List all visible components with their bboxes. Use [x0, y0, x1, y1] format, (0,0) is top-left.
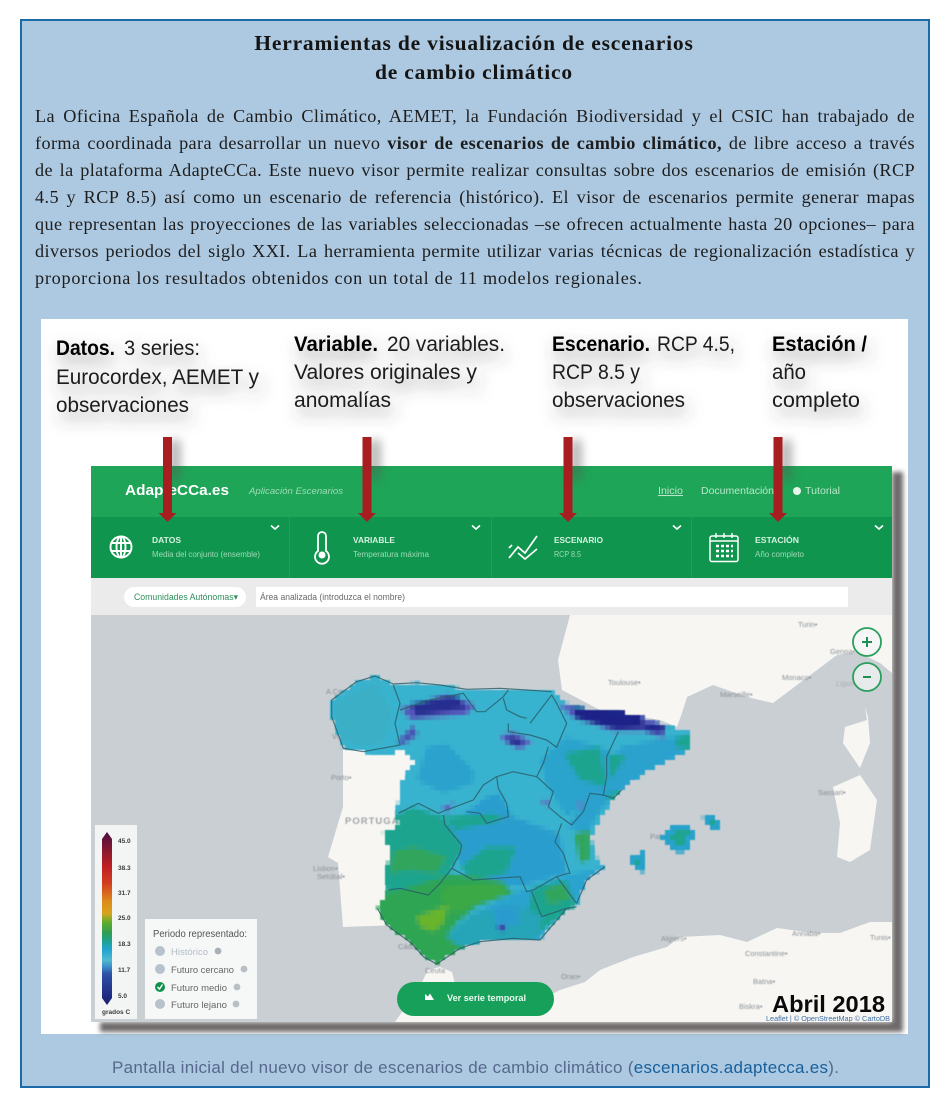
tab bar [91, 517, 892, 578]
map place labels: Ceuta [425, 966, 446, 975]
green app header [91, 466, 892, 517]
map place labels: Algiers• [661, 934, 687, 943]
map place labels: Setúbal• [317, 872, 345, 881]
intro text block: 4.5 y RCP 8.5) así como un escenario de referencia (histórico). El visor de escenarios permite generar mapas [35, 187, 915, 207]
callout: Datos: 3 series: [124, 337, 200, 360]
tab: escenario: ESCENARIO [554, 535, 603, 545]
callout: Escenario: RCP 4.5, [657, 333, 735, 356]
nav links [658, 485, 840, 497]
nav links: Documentación [701, 485, 774, 497]
callout: Estación [772, 333, 867, 412]
period legend: Periodo representado: [153, 929, 247, 940]
map attribution: Leaflet | © OpenStreetMap © CartoDB [766, 1015, 890, 1023]
tab: estación [710, 526, 883, 562]
arrow: Variable [358, 437, 376, 522]
callout: Datos: Datos. [56, 337, 115, 360]
map place labels: Marseille• [720, 690, 753, 699]
map place labels: Cádiz [398, 942, 417, 951]
land: France and Italy [558, 615, 892, 727]
color scale legend: 38.3 [118, 865, 131, 872]
intro text block: La Oficina Española de Cambio Climático, AEMET, la Fundación Biodiversidad y el CSIC han trabajado de [35, 106, 915, 126]
map place labels: Porto• [331, 773, 352, 782]
period legend: Futuro lejano [171, 1000, 227, 1011]
map place labels: Palma [650, 832, 672, 841]
white screenshot card [41, 319, 908, 1034]
map place labels: Turin• [798, 620, 818, 629]
choropleth: Spain temperature [320, 670, 721, 970]
search bar [91, 578, 892, 615]
tab: estación: ESTACIÓN [755, 534, 799, 545]
color scale legend: 31.7 [118, 890, 131, 897]
map place labels: Genoa• [830, 647, 856, 656]
map place labels: Oran• [561, 972, 581, 981]
callout: Estación: completo [772, 389, 860, 412]
arrow: Datos [158, 437, 176, 522]
tab: variable: VARIABLE [353, 535, 395, 545]
map place labels: Monaco• [782, 673, 812, 682]
button: ver serie temporal [397, 982, 554, 1016]
callout: Variable: Valores originales y [294, 361, 477, 384]
app subtitle: Aplicación Escenarios [248, 486, 343, 497]
callout: Variable: 20 variables. [387, 333, 505, 356]
callout: Variable: Variable. [294, 333, 378, 356]
map place labels: Annaba• [792, 929, 821, 938]
callout: Estación: año [772, 361, 806, 384]
tab: estación: Año completo [755, 550, 805, 559]
callout: Datos: Eurocordex, AEMET y [56, 366, 259, 389]
land: Corsica [843, 707, 870, 768]
period legend [145, 919, 257, 1019]
callout: Estación: Estación / [772, 333, 867, 356]
color scale legend: grados C [102, 1009, 130, 1016]
tab: escenario: RCP 8.5 [554, 550, 581, 559]
land: Portugal [328, 740, 420, 927]
color scale legend: 5.0 [118, 993, 127, 1000]
callout: Variable [294, 333, 505, 412]
title line 2: de cambio climático [375, 60, 573, 84]
intro text block: forma coordinada para desarrollar un nuevo visor de escenarios de cambio climático, de libre acceso a través [35, 133, 915, 153]
zoom in button [853, 628, 881, 656]
tab: datos: DATOS [152, 535, 181, 545]
Balearic Islands [630, 816, 721, 872]
map [91, 615, 892, 1023]
map place labels: Ligurian [836, 679, 863, 688]
callout: Escenario: RCP 8.5 y [552, 361, 640, 384]
map place labels [313, 620, 891, 1011]
color scale legend: 18.3 [118, 941, 131, 948]
nav links: Tutorial [805, 485, 840, 497]
map place labels: Vigo [332, 732, 347, 741]
callout: Variable: anomalías [294, 389, 391, 412]
color scale legend: 45.0 [118, 838, 131, 845]
screenshot figure [41, 319, 908, 1036]
map place labels: Batna• [753, 977, 776, 986]
callout: Escenario [552, 333, 735, 412]
color scale legend: 25.0 [118, 915, 131, 922]
map place labels: Lisbon• [313, 864, 338, 873]
callout: Datos: observaciones [56, 394, 189, 417]
callout: Datos [56, 337, 259, 417]
arrows soft shadow [170, 440, 791, 480]
intro text block: diversos periodos del siglo XXI. La herramienta permite utilizar varias técnicas de regionalización estadística y [35, 241, 915, 261]
app window shadow [100, 472, 903, 1032]
title line 1: Herramientas de visualización de escenarios [254, 31, 694, 55]
regional boundaries [332, 676, 622, 964]
caption: Pantalla inicial del nuevo visor de escenarios de cambio climático (escenarios.adaptecca.es). [112, 1058, 839, 1077]
label: Abril 2018: Abril 2018 [772, 991, 885, 1017]
map place labels: A Coruña [326, 687, 358, 696]
intro text block: que representan las proyecciones de las variables seleccionadas –se ofrecen actualmente hasta 20 opciones– para [35, 214, 915, 234]
tab: escenario [509, 526, 681, 559]
search bar: Área analizada (introduzca el nombre) [260, 592, 405, 602]
color scale legend [95, 825, 137, 1019]
map place labels: Sassari• [818, 788, 846, 797]
map place labels: Tunis• [870, 933, 891, 942]
map place labels: Toulouse• [608, 678, 641, 687]
tab: variable [315, 526, 480, 564]
zoom out button [853, 663, 881, 691]
app name: AdapteCCa.es [125, 483, 229, 499]
callout: Escenario: Escenario. [552, 333, 650, 356]
period legend: Futuro cercano [171, 965, 234, 976]
period legend: Futuro medio [171, 983, 227, 994]
arrow: Escenario [559, 437, 577, 522]
search bar: Comunidades Autónomas▾ [134, 592, 238, 602]
tab: variable: Temperatura máxima [353, 550, 430, 559]
intro text block: de la plataforma AdapteCCa. Este nuevo visor permite realizar consultas sobre dos escenarios de emisión (RCP [35, 160, 915, 180]
period legend: Histórico [171, 947, 208, 958]
map place labels: Constantine• [745, 949, 788, 958]
map place labels: Biskra• [739, 1002, 763, 1011]
arrow: Estación [769, 437, 787, 522]
land: Sardinia [833, 775, 877, 862]
tab: datos [110, 526, 279, 559]
land: North Africa [395, 922, 892, 1022]
button: ver serie temporal: Ver serie temporal [447, 993, 526, 1004]
nav links: Inicio [658, 485, 683, 497]
callout: Escenario: observaciones [552, 389, 685, 412]
intro text block: proporciona los resultados obtenidos con un total de 11 modelos regionales. [35, 268, 643, 288]
tab: datos: Media del conjunto (ensemble) [152, 550, 260, 559]
map place labels: PORTUGAL [345, 816, 406, 827]
intro text block [35, 106, 915, 288]
color scale legend: 11.7 [118, 967, 131, 974]
